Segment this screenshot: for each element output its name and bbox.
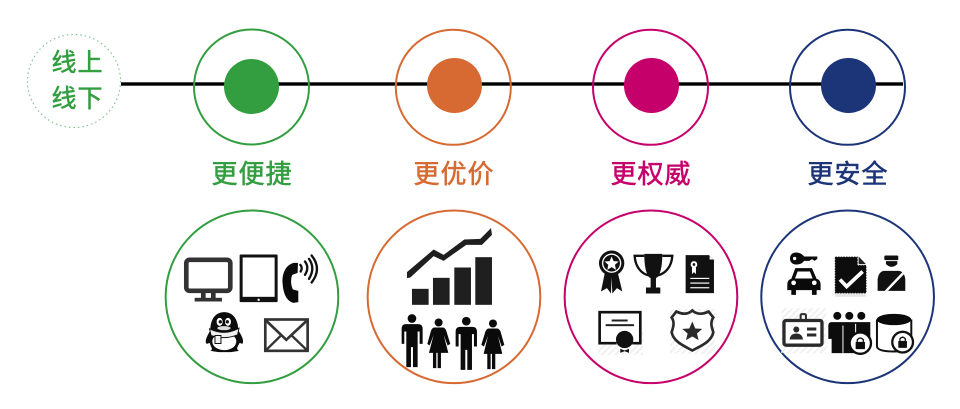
node: safer [790, 30, 905, 145]
icon: group of people [402, 314, 504, 370]
panel: authority [565, 210, 737, 383]
node: convenient [194, 30, 309, 144]
icon: checked document [835, 256, 866, 297]
icon: trophy [635, 254, 672, 293]
panel: safety [761, 210, 934, 383]
icon: database with lock [877, 314, 913, 352]
heading: 更安全: 更安全 [807, 159, 889, 189]
badge: online offline: 线下 [52, 85, 104, 113]
heading: 更便捷: 更便捷 [211, 159, 293, 189]
panel: better price [368, 210, 540, 383]
icon: certificate [598, 312, 643, 355]
icon: rising trend line [407, 228, 492, 278]
panel: convenient channels [166, 210, 338, 383]
icon: document with ribbon [686, 255, 714, 293]
heading: 更权威: 更权威 [610, 159, 692, 189]
icon: bar chart [412, 257, 492, 305]
badge: online offline [28, 34, 120, 128]
icon: monitor [186, 260, 230, 301]
icon: envelope [265, 319, 308, 351]
icon: tablet [240, 254, 278, 302]
icon: rosette award [599, 250, 624, 293]
icon: telephone with signal [282, 255, 317, 303]
icon: QQ penguin [206, 312, 243, 352]
node: better price [396, 30, 511, 145]
badge: online offline: 线上 [52, 49, 104, 77]
icon: security guard [878, 255, 905, 291]
icon: ID card [781, 308, 826, 353]
icon: team with lock [828, 312, 871, 354]
node: authority [593, 30, 708, 145]
timeline line [121, 82, 903, 86]
icon: police badge [670, 309, 715, 354]
heading: 更优价: 更优价 [413, 159, 495, 189]
icon: key and car [787, 252, 821, 295]
